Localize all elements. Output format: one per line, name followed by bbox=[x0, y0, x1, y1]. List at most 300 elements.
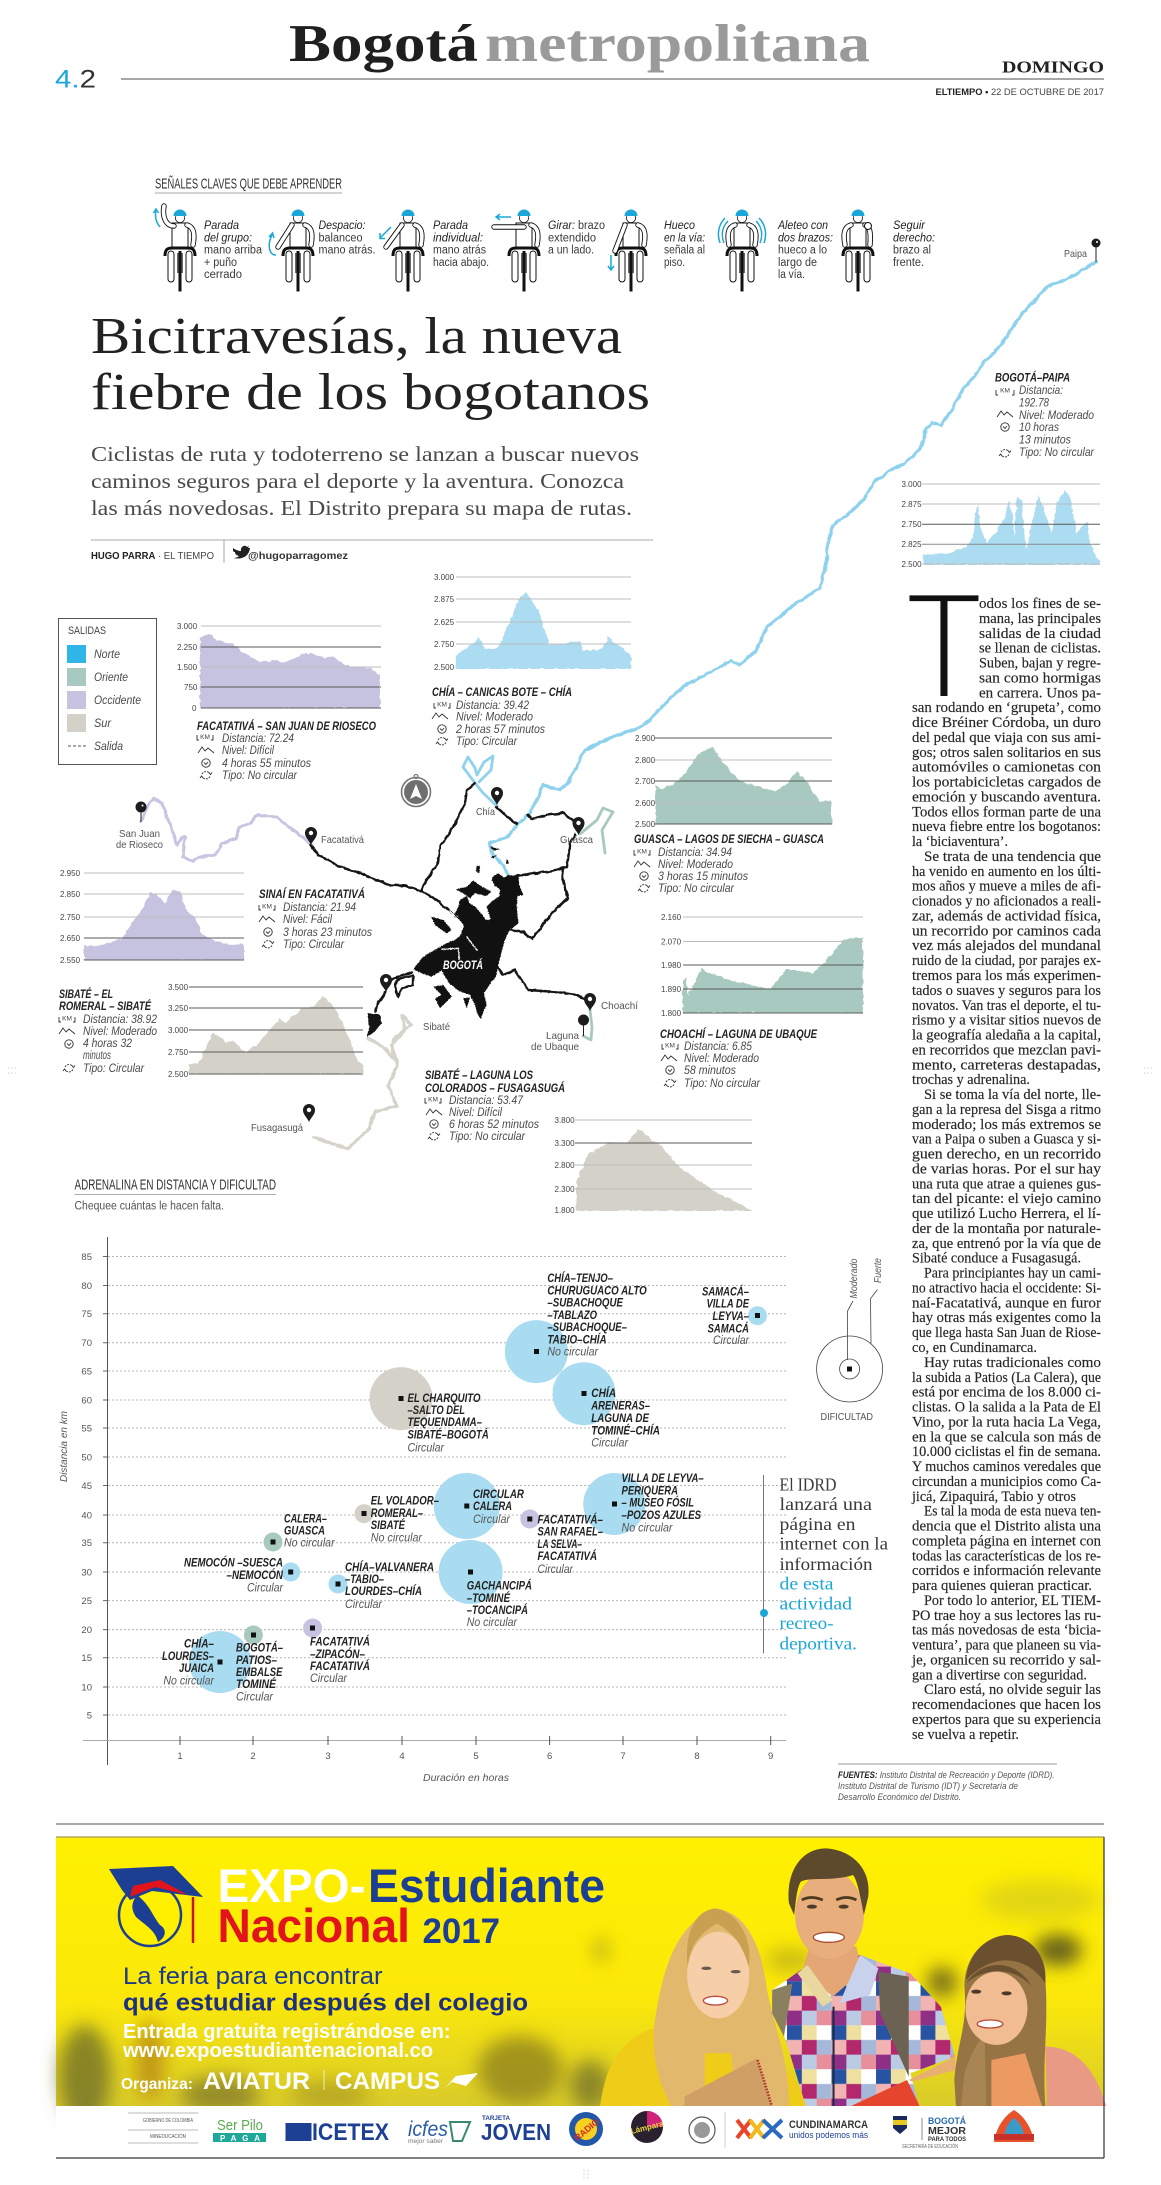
route card: Sinaí: Tipo: Circular bbox=[283, 939, 345, 951]
label: Bogotá Patios: TOMINÉ bbox=[236, 1678, 276, 1691]
chart: Chía profile: 3.000 bbox=[434, 573, 455, 582]
label: Facatativá San Rafael bbox=[538, 1514, 604, 1576]
route card: Choachí: Tipo: No circular bbox=[684, 1078, 761, 1090]
logo: Gobierno de Colombia: MINEDUCACIÓN bbox=[150, 2133, 186, 2140]
ad subheading: qué estudiar después del colegio bbox=[123, 1990, 528, 2016]
article body text: tas más novedosas de esta ‘bicia- bbox=[912, 1623, 1101, 1639]
route: Sibaté to Fusagasugá bbox=[314, 1015, 411, 1149]
route card: Facatativá bbox=[197, 720, 376, 782]
signal: hueco en la via: piso. bbox=[664, 257, 685, 269]
route card: Chía: Nivel: Moderado bbox=[456, 712, 534, 724]
route card: Guasca: 3 horas 15 minutos bbox=[658, 871, 748, 883]
label: Bogotá Patios: Circular bbox=[236, 1692, 274, 1704]
signal: seguir derecho: frente. bbox=[893, 257, 924, 269]
chart: Sibaté Fusagasugá profile: 2.300 bbox=[554, 1185, 575, 1194]
label: Villa de Leyva: –POZOS AZULES bbox=[622, 1510, 701, 1522]
label: Gachancipá: –TOCANCIPÁ bbox=[467, 1604, 528, 1617]
route card: Bogotá Paipa: Nivel: Moderado bbox=[1019, 410, 1095, 422]
y axis labels: 35 bbox=[81, 1538, 92, 1549]
article body text: ha venido en aumento en los últi- bbox=[912, 864, 1101, 880]
route card: Guasca: Tipo: No circular bbox=[658, 883, 735, 895]
callout: IDRD: información bbox=[780, 1554, 872, 1574]
article body text: rismo y a visitar sitios nuevos de bbox=[912, 1013, 1101, 1029]
route card: Chía bbox=[432, 686, 572, 748]
route card: Chía: KM bbox=[437, 702, 447, 708]
pin: Fusagasugá bbox=[251, 1104, 315, 1134]
label: Circular Calera: CALERA bbox=[473, 1501, 512, 1513]
chart: Sibaté profile: 3.000 bbox=[168, 1026, 189, 1035]
Paipa pin bbox=[1064, 238, 1100, 262]
legend: salidas: Sur bbox=[94, 718, 112, 730]
byline: @hugoparragomez bbox=[248, 550, 348, 562]
label: Villa de Leyva bbox=[622, 1473, 704, 1535]
chart: Paipa profile: 2.825 bbox=[902, 540, 922, 549]
label: Chía Tenjo: CHÍA–TENJO– bbox=[547, 1272, 613, 1285]
y axis labels: 10 bbox=[81, 1682, 92, 1694]
route card: Sinaí: 3 horas 23 minutos bbox=[283, 927, 372, 939]
deck text bbox=[91, 442, 639, 520]
logo: Bogotá mejor para todos: SECRETARÍA DE EDUCACIÓN bbox=[902, 2143, 958, 2150]
page number: 4.2 bbox=[55, 66, 96, 94]
chart: Sibaté profile: 3.250 bbox=[168, 1004, 189, 1013]
route card: Facatativá: Distancia: 72.24 bbox=[222, 733, 294, 745]
label: Facatativá Zipacón bbox=[310, 1636, 370, 1685]
callout: IDRD: internet con la bbox=[780, 1534, 888, 1554]
route card: Bogotá Paipa: 192.78 bbox=[1019, 398, 1050, 410]
callout: IDRD bbox=[760, 1474, 888, 1654]
route card: Sinaí bbox=[259, 888, 372, 951]
section title: metropolitana bbox=[485, 15, 870, 73]
article body text: salidas de la ciudad bbox=[979, 626, 1101, 642]
logo: Gobierno de Colombia bbox=[128, 2113, 198, 2143]
route card: Guasca: Distancia: 34.94 bbox=[658, 847, 732, 859]
heading: adrenalina: ADRENALINA EN DISTANCIA Y DIFICULTAD bbox=[74, 1178, 276, 1194]
chart: Choachí profile: 2.160 bbox=[661, 913, 682, 922]
legend: salidas bbox=[58, 618, 156, 764]
signal: seguir derecho: derecho: bbox=[893, 232, 935, 244]
article body text: PO trae hoy a sus lectores las ru- bbox=[912, 1608, 1101, 1624]
route card: Sibaté Laguna Los Colorados bbox=[425, 1069, 565, 1143]
chart: Facatativá profile: 3.000 bbox=[177, 622, 198, 631]
label: Chía Areneras bbox=[590, 1387, 660, 1450]
article body text: mana, las principales bbox=[979, 611, 1101, 627]
route card: Chía: Distancia: 39.42 bbox=[456, 700, 530, 712]
article body text: mento, carreteras destapadas, bbox=[912, 1057, 1101, 1073]
route card: Sibaté El Romeral: KM bbox=[62, 1016, 72, 1022]
route card: Bogotá Paipa: KM bbox=[1000, 388, 1010, 394]
chart: Facatativá profile: 750 bbox=[184, 683, 198, 692]
article body text: completa página en internet con bbox=[912, 1533, 1101, 1549]
route: Choachí to Laguna de Ubaque bbox=[583, 1010, 592, 1040]
logo: Bogotá mejor para todos: MEJOR bbox=[928, 2126, 967, 2137]
logo: Cundinamarca: unidos podemos más bbox=[789, 2130, 868, 2140]
label: El Charquito: TEQUENDAMA– bbox=[408, 1417, 483, 1429]
article body text bbox=[904, 559, 1102, 1743]
route card: Chía: CHÍA – CANICAS BOTE – CHÍA bbox=[432, 686, 572, 699]
logo: icfes: icfes bbox=[408, 2118, 448, 2141]
article body text: dice Bréiner Córdoba, un duro bbox=[912, 715, 1101, 731]
byline: HUGO PARRA · EL TIEMPO bbox=[91, 551, 214, 562]
article body text: los portabicicletas cargados de bbox=[912, 775, 1101, 791]
article body text: Todos ellos forman parte de una bbox=[912, 804, 1102, 820]
article body text: 10.000 ciclistas el fin de semana. bbox=[912, 1444, 1101, 1460]
y axis labels: 85 bbox=[81, 1252, 92, 1263]
route: Bogotá to Paipa bbox=[490, 262, 1096, 875]
label: Chía Lourdes: CHÍA– bbox=[184, 1638, 215, 1650]
route card: Facatativá: FACATATIVÁ – SAN JUAN DE RIOSECO bbox=[197, 720, 376, 733]
route card: Sibaté El Romeral: Nivel: Moderado bbox=[83, 1026, 158, 1038]
article body text: ventura’, para que planeen su via- bbox=[912, 1638, 1101, 1654]
chart: Guasca profile: 2.600 bbox=[635, 799, 656, 808]
route card: Guasca: KM bbox=[637, 848, 647, 856]
x axis labels: 3 bbox=[325, 1751, 331, 1762]
label: Facatativá San Rafael: Circular bbox=[538, 1564, 574, 1576]
callout: IDRD: actividad bbox=[780, 1594, 852, 1614]
chart: Facatativá profile: 0 bbox=[192, 704, 197, 713]
route card: Sibaté Laguna Los Colorados: Nivel: Difícil bbox=[449, 1107, 502, 1119]
chart: Chía profile: 2.500 bbox=[434, 663, 455, 672]
article body text: naí-Facatativá, aunque en furor bbox=[912, 1295, 1101, 1311]
label: Chía Lourdes bbox=[162, 1638, 215, 1688]
route card: Sibaté Laguna Los Colorados: Distancia: 53.47 bbox=[449, 1095, 524, 1107]
pin: Laguna de Ubaque: Laguna bbox=[546, 1030, 579, 1042]
route: Guasca to Lagos de Siecha bbox=[580, 808, 613, 853]
pin: San Juan de Rioseco: San Juan bbox=[119, 828, 160, 840]
ad headline bbox=[218, 1859, 605, 1952]
article body text: vez más alejados del mundanal bbox=[912, 938, 1101, 954]
chart: Sinaí profile: 2.950 bbox=[60, 869, 81, 878]
difficulty key: DIFICULTAD bbox=[820, 1411, 873, 1423]
Bogotá urban area bbox=[413, 847, 523, 1019]
x axis labels bbox=[177, 1751, 773, 1762]
y axis labels: 20 bbox=[81, 1625, 92, 1636]
label: Facatativá San Rafael: SAN RAFAEL– bbox=[538, 1527, 603, 1539]
article body text: no atractivo hacia el occidente: Si- bbox=[912, 1280, 1101, 1296]
pin: Chía: Chía bbox=[476, 806, 495, 818]
signal: parada del grupo bbox=[154, 206, 263, 292]
label: Chía Valvanera: CHÍA–VALVANERA bbox=[345, 1561, 434, 1574]
article body text: se llenan de ciclistas. bbox=[979, 641, 1101, 657]
Bogotá urban area: BOGOTÁ bbox=[443, 957, 483, 972]
signal: parada individual bbox=[380, 210, 489, 292]
chart: Sibaté profile: 2.750 bbox=[168, 1048, 189, 1057]
chart: Guasca profile bbox=[635, 734, 840, 829]
article body text: van a Paipa o suben a Guasca y si- bbox=[912, 1132, 1101, 1148]
chart: Paipa profile: 3.000 bbox=[902, 480, 922, 489]
label: Chía Tenjo: –SUBACHOQUE– bbox=[547, 1322, 627, 1334]
bubble chart bbox=[58, 1237, 786, 1784]
label: El Volador: SIBATÉ bbox=[371, 1519, 405, 1532]
sources note: FUENTES: Instituto Distrital de Recreación y Deporte (IDRD). bbox=[838, 1770, 1054, 1780]
article body text: ruido de la ciudad, por parajes ex- bbox=[912, 953, 1101, 969]
signal: girar: extendido bbox=[548, 232, 596, 244]
article body text: expertos para que su experiencia bbox=[912, 1712, 1102, 1728]
x axis labels: 1 bbox=[177, 1751, 183, 1762]
article body text: Claro está, no olvide seguir las bbox=[924, 1682, 1101, 1698]
ad organizers: CAMPUS bbox=[335, 2068, 440, 2095]
route card: Sibaté El Romeral bbox=[59, 988, 158, 1075]
chart: Choachí profile: 1.980 bbox=[661, 961, 682, 970]
ad headline: Estudiante bbox=[368, 1859, 605, 1912]
logo: La Lámpara: Lámpara bbox=[630, 2119, 665, 2136]
y axis labels: 60 bbox=[81, 1396, 92, 1406]
difficulty key bbox=[817, 1258, 884, 1423]
label: Chía Lourdes: No circular bbox=[163, 1676, 215, 1688]
pin: Facatativá: Facatativá bbox=[321, 834, 364, 846]
y axis labels: 55 bbox=[81, 1424, 92, 1434]
label: Chía Lourdes: LOURDES– bbox=[162, 1651, 214, 1663]
article body text: de varias horas. Por el sur hay bbox=[912, 1161, 1102, 1177]
article body text: gos; otros salen solitarios en sus bbox=[912, 745, 1101, 761]
logo: Bogotá mejor para todos: BOGOTÁ bbox=[928, 2116, 966, 2126]
article body text: san como hormigas bbox=[979, 670, 1101, 686]
label: Chía Areneras: CHÍA bbox=[591, 1387, 616, 1400]
label: El Volador: EL VOLADOR– bbox=[371, 1496, 440, 1508]
pin: Guasca: Guasca bbox=[560, 834, 593, 846]
article body text: jicá, Zipaquirá, Tabio y otros bbox=[911, 1489, 1076, 1505]
pin: Choachí bbox=[584, 993, 638, 1012]
drop cap: T bbox=[904, 559, 984, 732]
signal: hueco en la via bbox=[608, 210, 705, 292]
chart: Chía profile: 2.625 bbox=[434, 618, 455, 627]
deck text: las más novedosas. El Distrito prepara su mapa de rutas. bbox=[91, 496, 632, 520]
signal: parada del grupo: + puño bbox=[204, 257, 237, 269]
route card: Choachí: Distancia: 6.85 bbox=[684, 1041, 753, 1053]
label: Bogotá Patios bbox=[236, 1642, 283, 1704]
label: Gachancipá: –TOMINÉ bbox=[467, 1592, 510, 1605]
crop marks bbox=[8, 1068, 1152, 2180]
article body text: la geografía aledaña a la capital, bbox=[912, 1028, 1101, 1044]
chart: Guasca profile: 2.700 bbox=[635, 777, 656, 786]
route card: Choachí: 58 minutos bbox=[684, 1065, 736, 1077]
legend: salidas: Salida bbox=[94, 741, 123, 753]
logo: radio bbox=[569, 2112, 603, 2146]
y axis labels: 45 bbox=[81, 1481, 92, 1492]
article body text: en la que se calcula son más de bbox=[912, 1429, 1101, 1445]
route card: Sibaté Laguna Los Colorados: KM bbox=[428, 1096, 438, 1104]
student: centre boy bbox=[772, 1848, 956, 2107]
label: El Charquito: Circular bbox=[408, 1443, 445, 1455]
route card: Bogotá Paipa bbox=[995, 372, 1095, 459]
x axis labels: 2 bbox=[250, 1751, 256, 1762]
sponsors band bbox=[56, 1837, 1104, 2158]
article body text: je, organicen su recorrido y sal- bbox=[911, 1652, 1101, 1668]
chart: Sinaí profile bbox=[60, 869, 250, 965]
label: Calera Guasca bbox=[284, 1514, 336, 1550]
article body text: mos años y mueve a miles de afi- bbox=[912, 879, 1101, 895]
route card: Bogotá Paipa: Tipo: No circular bbox=[1019, 447, 1095, 459]
route card: Chía: Tipo: Circular bbox=[456, 736, 518, 748]
y axis title: Distancia en km bbox=[58, 1411, 70, 1482]
title bbox=[91, 308, 650, 421]
route card: Chía: 2 horas 57 minutos bbox=[455, 724, 545, 736]
label: El Volador: ROMERAL– bbox=[371, 1508, 423, 1520]
logo: seal bbox=[689, 2112, 725, 2148]
route card: Choachí bbox=[660, 1028, 817, 1090]
chart: Sibaté Fusagasugá profile: 3.300 bbox=[554, 1139, 575, 1148]
label: Villa de Leyva: – MUSEO FÓSIL bbox=[622, 1497, 694, 1510]
article body text: circundan a municipios como Ca- bbox=[912, 1474, 1101, 1490]
label: Villa de Leyva: VILLA DE LEYVA– bbox=[622, 1473, 704, 1485]
article body text: Hay rutas tradicionales como bbox=[924, 1355, 1101, 1371]
label: Facatativá Zipacón: FACATATIVÁ bbox=[310, 1660, 370, 1673]
article body text: un recorrido por caminos cada bbox=[912, 923, 1102, 939]
chart: Sibaté Fusagasugá profile: 3.800 bbox=[554, 1116, 575, 1125]
label: Samacá: SAMACÁ bbox=[708, 1322, 749, 1335]
panel: EXPO-Estudiante advertisement bbox=[56, 1837, 1106, 2158]
callout: IDRD: recreo- bbox=[780, 1613, 834, 1633]
callout: IDRD: lanzará una bbox=[780, 1494, 872, 1514]
signal: parada individual: individual: bbox=[433, 232, 483, 244]
label: Chía Lourdes: JUAICA bbox=[179, 1663, 214, 1675]
route card: Facatativá: Tipo: No circular bbox=[222, 770, 298, 782]
signal: aleteo: dos brazos: bbox=[778, 232, 833, 244]
route card: Sibaté Laguna Los Colorados: SIBATÉ – LAGUNA LOS bbox=[425, 1069, 533, 1082]
icon: expo logo globe and cap bbox=[109, 1866, 203, 1946]
y axis labels: 40 bbox=[81, 1510, 92, 1522]
logo: ICETEX bbox=[286, 2119, 389, 2146]
logo: Ser Pilo Paga: Ser Pilo bbox=[217, 2117, 263, 2134]
chart: Sinaí profile: 2.650 bbox=[60, 934, 81, 943]
label: Facatativá San Rafael: FACATATIVÁ– bbox=[538, 1514, 604, 1526]
x axis title: Duración en horas bbox=[423, 1772, 510, 1784]
Paipa pin: Paipa bbox=[1064, 248, 1087, 260]
x axis labels: 5 bbox=[473, 1751, 479, 1762]
deck text: caminos seguros para el deporte y la aventura. Conozca bbox=[91, 469, 625, 493]
route card: Guasca: Nivel: Moderado bbox=[658, 859, 734, 871]
route: Facatativá to San Juan de Rioseco bbox=[141, 798, 312, 861]
icon: compass bbox=[402, 774, 430, 806]
pin: Laguna de Ubaque: de Ubaque bbox=[531, 1041, 579, 1053]
masthead bbox=[55, 15, 1104, 97]
signal: parada del grupo: Parada bbox=[204, 220, 239, 232]
article body text: emoción y buscando aventura. bbox=[912, 789, 1101, 805]
label: Nemocón bbox=[184, 1557, 284, 1595]
signal: hueco en la via: señala al bbox=[664, 244, 705, 256]
route card: Bogotá Paipa: BOGOTÁ–PAIPA bbox=[995, 372, 1070, 384]
article body text: Si se toma la vía del norte, lle- bbox=[924, 1087, 1101, 1103]
byline bbox=[91, 540, 653, 563]
label: Chía Tenjo: –SUBACHOQUE bbox=[547, 1298, 623, 1310]
logo: ICETEX: ICETEX bbox=[312, 2119, 389, 2146]
signal: parada individual: hacia abajo. bbox=[433, 257, 489, 269]
signal: seguir derecho bbox=[843, 210, 935, 292]
article body text: automóviles o camionetas con bbox=[912, 760, 1101, 776]
ad registration text: www.expoestudiantenacional.co bbox=[122, 2040, 433, 2062]
section rule bbox=[56, 1823, 1104, 1825]
route card: Sibaté Laguna Los Colorados: Tipo: No circular bbox=[449, 1131, 526, 1143]
article body text: se vuelva a repetir. bbox=[912, 1727, 1019, 1743]
article body text: la subida a Patios (La Calera), que bbox=[912, 1370, 1101, 1386]
article body text: que utilizó Lucho Herrera, el lí- bbox=[912, 1206, 1101, 1222]
deck text: Ciclistas de ruta y todoterreno se lanzan a buscar nuevos bbox=[91, 442, 639, 466]
article body text: que llega hasta San Juan de Riose- bbox=[912, 1325, 1101, 1341]
y axis labels: 5 bbox=[87, 1710, 92, 1722]
label: Chía Valvanera bbox=[345, 1561, 434, 1611]
black access roads bbox=[311, 783, 590, 1012]
route: Chía loop bbox=[463, 756, 497, 806]
route card: Sibaté El Romeral: Distancia: 38.92 bbox=[83, 1014, 158, 1026]
logo: Tarjeta Joven: TARJETA bbox=[482, 2116, 511, 2122]
y axis labels: 25 bbox=[81, 1596, 92, 1607]
label: Circular Calera: Circular bbox=[473, 1514, 511, 1526]
ad registration text: Entrada gratuita registrándose en: bbox=[123, 2021, 450, 2043]
label: Chía Tenjo: CHURUGUACO ALTO bbox=[547, 1286, 647, 1298]
chart: Choachí profile: 2.070 bbox=[661, 938, 682, 946]
chart: Facatativá profile bbox=[177, 622, 390, 713]
signals heading: SEÑALES CLAVES QUE DEBE APRENDER bbox=[155, 176, 342, 192]
logo: mascot bbox=[994, 2110, 1034, 2142]
chart: Sibaté profile: 2.500 bbox=[168, 1070, 189, 1079]
route card: Sibaté Laguna Los Colorados: COLORADOS – FUSAGASUGÁ bbox=[425, 1082, 565, 1095]
y axis labels: 50 bbox=[81, 1452, 92, 1464]
label: Chía Tenjo: TABIO–CHÍA bbox=[547, 1334, 607, 1346]
label: Bogotá Patios: EMBALSE bbox=[236, 1667, 283, 1679]
article body text: recomendaciones que hacen los bbox=[912, 1697, 1101, 1713]
article body text: dencia que el Distrito alista una bbox=[912, 1519, 1102, 1535]
panel: cycling signals bbox=[154, 176, 935, 292]
label: El Volador: No circular bbox=[371, 1532, 423, 1544]
label: Chía Valvanera: –TABIO– bbox=[345, 1574, 384, 1586]
x axis labels: 6 bbox=[547, 1751, 552, 1762]
route card: Sibaté El Romeral: ROMERAL – SIBATÉ bbox=[59, 1000, 151, 1013]
signal: aleteo: la vía. bbox=[778, 269, 805, 281]
sources note bbox=[838, 1764, 1057, 1802]
x axis labels: 8 bbox=[694, 1751, 700, 1762]
article body text: Se trata de una tendencia que bbox=[924, 849, 1101, 865]
label: Chía Valvanera: LOURDES–CHÍA bbox=[345, 1585, 422, 1598]
article body text: gan a divertirse con seguridad. bbox=[912, 1667, 1087, 1683]
ad organizers bbox=[121, 2068, 478, 2095]
label: Nemocón: NEMOCÓN –SUESCA bbox=[184, 1557, 283, 1570]
logo: Cundinamarca: CUNDINAMARCA bbox=[789, 2119, 868, 2131]
chart: Guasca profile: 2.500 bbox=[635, 820, 656, 829]
chart: Choachí profile bbox=[661, 913, 868, 1018]
route card: Choachí: CHOACHÍ – LAGUNA DE UBAQUE bbox=[660, 1028, 817, 1041]
ad subheading bbox=[123, 1963, 528, 2016]
article body text: todas las características de los re- bbox=[912, 1548, 1101, 1564]
article body text: trochas y adrenalina. bbox=[912, 1072, 1030, 1088]
article body text: del pedal que viaja con sus ami- bbox=[912, 730, 1101, 746]
article body text: der de la montaña por naturale- bbox=[912, 1221, 1101, 1237]
signal: aleteo bbox=[718, 210, 833, 292]
legend: salidas: SALIDAS bbox=[68, 625, 106, 637]
label: Nemocón: Circular bbox=[247, 1583, 284, 1595]
ad headline: EXPO- bbox=[218, 1859, 366, 1912]
chart: Sibaté Fusagasugá profile: 2.800 bbox=[554, 1161, 575, 1170]
y axis labels: 75 bbox=[81, 1309, 92, 1320]
title: fiebre de los bogotanos bbox=[91, 364, 650, 421]
route card: Sibaté El Romeral: Tipo: Circular bbox=[83, 1063, 145, 1075]
label: Chía Areneras: LAGUNA DE bbox=[591, 1413, 649, 1425]
chart: Sibaté Fusagasugá profile: 1.800 bbox=[554, 1206, 575, 1215]
chart: Guasca profile: 2.900 bbox=[635, 734, 656, 743]
legend: salidas: Norte bbox=[94, 649, 120, 661]
label: Samacá: Circular bbox=[713, 1335, 750, 1347]
label: Circular Calera: CIRCULAR bbox=[473, 1489, 525, 1501]
pin: Chía bbox=[476, 787, 503, 818]
label: Facatativá Zipacón: Circular bbox=[310, 1673, 348, 1685]
signal: parada del grupo: mano arriba bbox=[204, 244, 263, 256]
label: Chía Tenjo: No circular bbox=[547, 1347, 599, 1359]
chart: Chía profile bbox=[434, 573, 640, 672]
signal: despacio bbox=[269, 210, 376, 292]
logo: Gobierno de Colombia: GOBIERNO DE COLOMBIA bbox=[143, 2118, 194, 2124]
logo: icfes bbox=[408, 2118, 470, 2145]
logo: icfes: mejor saber bbox=[408, 2139, 443, 2145]
legend: salidas: Occidente bbox=[94, 695, 141, 707]
route card: Sinaí: KM bbox=[262, 904, 272, 910]
